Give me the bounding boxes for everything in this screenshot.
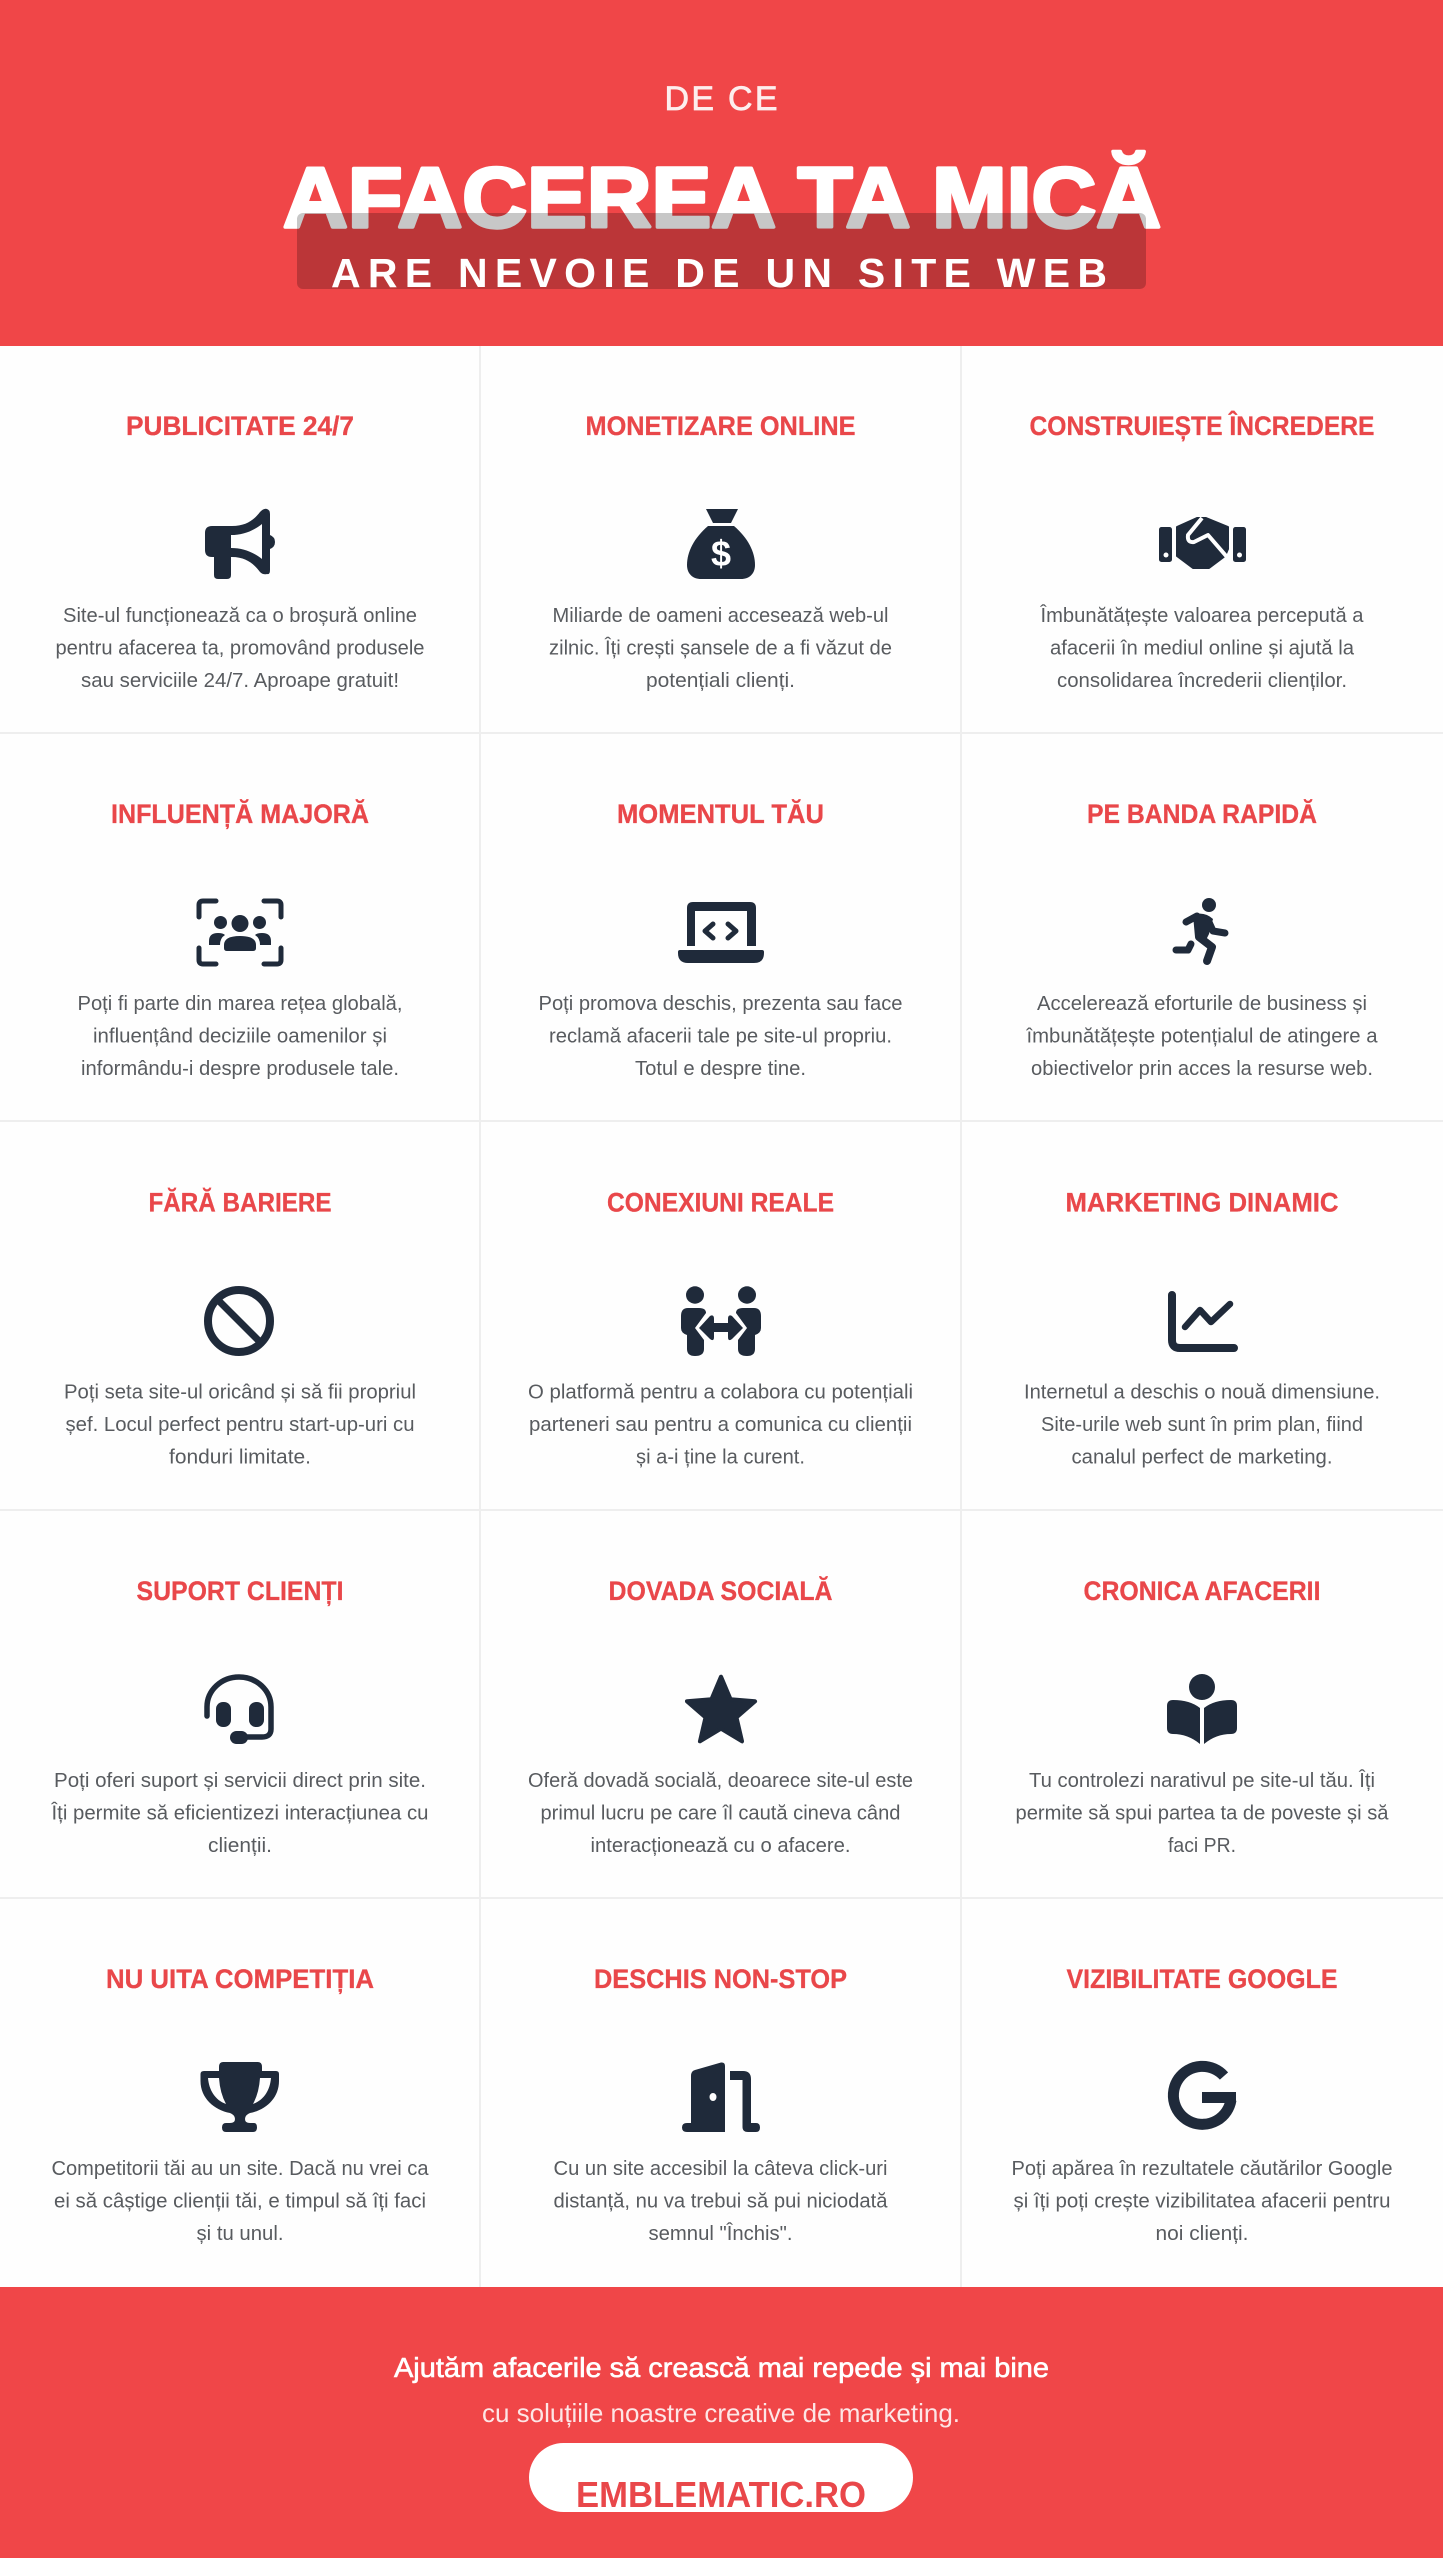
description: Poți fi parte din marea rețea globală, <box>78 992 402 1015</box>
heading: MONETIZARE ONLINE <box>586 411 856 441</box>
description: informându-i despre produsele tale. <box>81 1057 399 1080</box>
icon: money bag: $ <box>711 533 731 574</box>
description: Internetul a deschis o nouă dimensiune. <box>1024 1380 1380 1404</box>
heading: CONSTRUIEȘTE ÎNCREDERE <box>1030 410 1374 441</box>
description <box>1012 2157 1392 2245</box>
description: afacerii în mediul online și ajută la <box>1050 636 1355 660</box>
description: potențiali clienți. <box>646 669 795 692</box>
description: Îți permite să eficientizezi interacțiunea cu <box>51 1802 429 1824</box>
panel: marketing dinamic <box>1024 1188 1380 1468</box>
description: reclamă afacerii tale pe site-ul propriu. <box>549 1024 892 1048</box>
button: emblematic.ro: EMBLEMATIC.RO <box>576 2474 866 2515</box>
footer panel <box>0 2287 1443 2558</box>
description: îmbunătățește potențialul de atingere a <box>1026 1024 1378 1048</box>
subtitle band <box>297 213 1146 289</box>
heading: SUPORT CLIENȚI <box>136 1576 344 1606</box>
panel: vizibilitate google <box>1012 1964 1392 2245</box>
heading: INFLUENȚĂ MAJORĂ <box>111 798 369 829</box>
description: faci PR. <box>1168 1834 1236 1857</box>
description: clienții. <box>208 1834 272 1857</box>
description <box>528 1769 913 1857</box>
panel: suport clienți <box>51 1576 429 1857</box>
panel: momentul tău <box>538 798 902 1080</box>
icon: laptop with code <box>678 902 764 963</box>
description: și a-i ține la curent. <box>636 1446 805 1468</box>
description: consolidarea încrederii clienților. <box>1057 669 1347 692</box>
icon: open door <box>682 2062 760 2132</box>
description: O platformă pentru a colabora cu potențiali <box>528 1380 913 1404</box>
panel: nu uita competiția <box>52 1964 429 2245</box>
description: Oferă dovadă socială, deoarece site-ul este <box>528 1769 913 1792</box>
description <box>554 2157 888 2245</box>
description: pentru afacerea ta, promovând produsele <box>56 636 424 660</box>
icon: megaphone <box>205 509 275 579</box>
icon: money bag <box>687 509 755 579</box>
description: Poți oferi suport și servicii direct prin site. <box>54 1769 426 1792</box>
description: noi clienți. <box>1156 2222 1248 2245</box>
description: Totul e despre tine. <box>635 1057 806 1080</box>
heading: VIZIBILITATE GOOGLE <box>1066 1964 1338 1994</box>
heading: PUBLICITATE 24/7 <box>126 411 354 441</box>
icon: headset <box>207 1677 271 1744</box>
description: primul lucru pe care îl caută cineva când <box>540 1802 900 1824</box>
panel: pe banda rapidă <box>1026 798 1378 1080</box>
description: Poți promova deschis, prezenta sau face <box>538 992 902 1015</box>
icon: google g <box>1173 2066 1236 2124</box>
description: Poți seta site-ul oricând și să fii propriul <box>64 1380 416 1404</box>
title: AFACEREA TA MICĂ <box>283 151 1161 246</box>
icon: person reading book <box>1167 1674 1237 1744</box>
heading: MOMENTUL TĂU <box>617 798 824 829</box>
description <box>1024 1380 1380 1468</box>
description <box>56 604 424 692</box>
description: fonduri limitate. <box>169 1446 311 1468</box>
description: Tu controlezi narativul pe site-ul tău. Îți <box>1029 1769 1375 1792</box>
description: Miliarde de oameni accesează web-ul <box>552 604 888 627</box>
heading: MARKETING DINAMIC <box>1066 1188 1338 1218</box>
description: Cu un site accesibil la câteva click-uri <box>554 2157 888 2180</box>
description <box>51 1769 429 1857</box>
description <box>549 604 892 692</box>
heading: PE BANDA RAPIDĂ <box>1087 798 1317 829</box>
header panel <box>0 0 1443 346</box>
heading: DOVADA SOCIALĂ <box>608 1575 832 1606</box>
panel: conexiuni reale <box>528 1188 913 1468</box>
description: semnul "Închis". <box>648 2222 792 2245</box>
icon: runner <box>1176 898 1225 961</box>
panel: publicitate 24/7 <box>56 411 424 692</box>
panel: construiește încredere <box>1030 410 1374 692</box>
heading: DESCHIS NON-STOP <box>594 1964 847 1994</box>
panel: cronica afacerii <box>1016 1576 1389 1857</box>
description: șef. Locul perfect pentru start-up-uri cu <box>66 1413 414 1436</box>
panel: monetizare online <box>549 411 892 692</box>
description: parteneri sau pentru a comunica cu clienții <box>529 1413 912 1436</box>
description: Site-ul funcționează ca o broșură online <box>63 604 417 627</box>
description: și îți poți crește vizibilitatea afacerii pentru <box>1014 2190 1390 2212</box>
description <box>52 2157 429 2245</box>
description: sau serviciile 24/7. Aproape gratuit! <box>81 669 399 692</box>
footer subline: cu soluțiile noastre creative de marketing. <box>482 2398 960 2428</box>
description <box>1040 604 1364 692</box>
description: Competitorii tăi au un site. Dacă nu vrei ca <box>52 2157 429 2180</box>
description: permite să spui partea ta de poveste și să <box>1016 1802 1389 1824</box>
description: canalul perfect de marketing. <box>1072 1446 1332 1468</box>
icon: two people with arrow <box>681 1286 761 1356</box>
description <box>1016 1769 1389 1857</box>
description <box>538 992 902 1080</box>
icon: handshake <box>1159 518 1246 568</box>
heading: NU UITA COMPETIȚIA <box>106 1964 374 1994</box>
icon: audience in frame <box>199 901 281 964</box>
panel: fără bariere <box>64 1186 416 1468</box>
heading: FĂRĂ BARIERE <box>148 1186 332 1218</box>
subtitle: ARE NEVOIE DE UN SITE WEB <box>331 250 1107 296</box>
description: interacționează cu o afacere. <box>590 1834 850 1857</box>
panel: deschis non-stop <box>554 1964 888 2245</box>
button: emblematic.ro <box>529 2443 913 2515</box>
description: și tu unul. <box>196 2222 284 2245</box>
description: Site-urile web sunt în prim plan, fiind <box>1041 1413 1363 1436</box>
icon: line chart <box>1172 1295 1234 1348</box>
description: Îmbunătățește valoarea percepută a <box>1040 604 1364 627</box>
heading: CONEXIUNI REALE <box>607 1188 834 1218</box>
description <box>1026 992 1378 1080</box>
icon: prohibited sign <box>208 1290 270 1352</box>
icon: star <box>687 1677 755 1741</box>
description <box>64 1380 416 1468</box>
description: Accelerează eforturile de business și <box>1037 992 1367 1015</box>
icon: trophy <box>200 2062 279 2132</box>
description <box>528 1380 913 1468</box>
footer headline: Ajutăm afacerile să crească mai repede și mai bine <box>394 2352 1049 2383</box>
panel: influență majoră <box>78 798 402 1080</box>
description: Poți apărea în rezultatele căutărilor Google <box>1012 2157 1392 2180</box>
heading: CRONICA AFACERII <box>1084 1576 1320 1606</box>
description: distanță, nu va trebui să pui niciodată <box>554 2190 888 2212</box>
description: obiectivelor prin acces la resurse web. <box>1031 1057 1373 1080</box>
description: zilnic. Îți crești șansele de a fi văzut de <box>549 636 892 660</box>
panel: dovada socială <box>528 1575 913 1857</box>
kicker: de ce: DE CE <box>664 80 778 118</box>
description: influențând deciziile oamenilor și <box>93 1024 387 1048</box>
description: ei să câștige clienții tăi, e timpul să îți faci <box>54 2190 426 2212</box>
description <box>78 992 402 1080</box>
